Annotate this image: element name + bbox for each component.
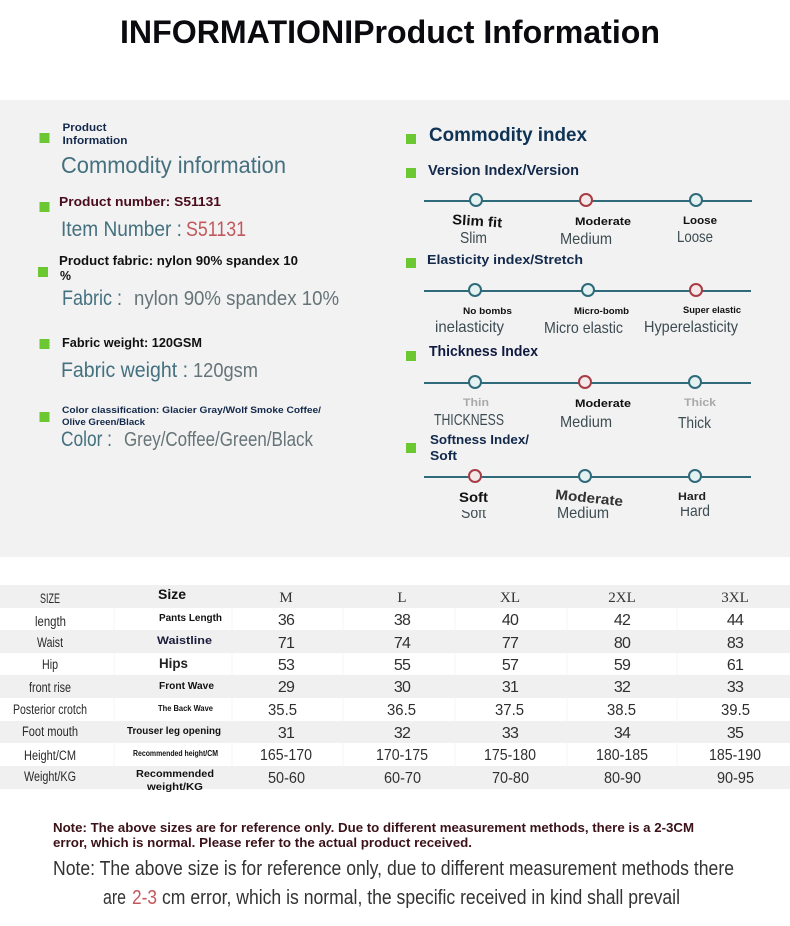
scale: elasticity: Hyperelasticity — [644, 319, 738, 336]
text: fabric weight label: Fabric weight: 120GSM — [62, 335, 202, 350]
row: weight: 70-80 — [492, 770, 529, 787]
row: front rise: front rise — [29, 680, 71, 695]
row: posterior crotch: Posterior crotch — [13, 702, 87, 717]
row: foot mouth: 35 — [727, 725, 744, 742]
row: weight: weight/KG — [146, 782, 203, 793]
icon: bullet product fabric — [38, 267, 48, 277]
scale: elasticity: inelasticity — [435, 319, 504, 336]
row: height: Recommended height/CM — [133, 749, 218, 758]
row: posterior crotch: 35.5 — [268, 702, 297, 719]
row: height: 170-175 — [376, 747, 428, 764]
scale: elasticity: Super elastic — [683, 305, 741, 316]
row: hip: Hip — [42, 657, 58, 672]
table header row: 2XL — [608, 590, 636, 606]
row: front rise: 32 — [614, 679, 631, 696]
row: hip: 59 — [614, 657, 631, 674]
scale: softness: Soft — [459, 489, 488, 505]
icon: bullet fabric weight — [40, 339, 50, 349]
scale: softness: Moderate — [555, 486, 624, 509]
row: foot mouth: 34 — [614, 725, 631, 742]
heading: softness index — [430, 433, 530, 463]
row: length: 44 — [727, 612, 744, 629]
row: weight: 80-90 — [604, 770, 641, 787]
row: hip: 53 — [278, 657, 295, 674]
scale: version: Loose — [677, 229, 713, 246]
scale: softness: Hard — [678, 491, 706, 503]
text: item number: S51131 — [186, 218, 246, 241]
scale: elasticity: No bombs — [463, 306, 512, 317]
scale: version — [424, 194, 752, 248]
row: waist: 74 — [394, 635, 411, 652]
row: waist — [37, 635, 744, 652]
text: color values: Color : — [61, 428, 112, 451]
text: product fabric — [59, 253, 298, 283]
icon: bullet color — [40, 412, 50, 422]
scale: thickness: Moderate — [575, 398, 631, 410]
scale: elasticity — [424, 284, 751, 337]
text: fabric composition — [62, 287, 339, 310]
row: weight: 90-95 — [717, 770, 754, 787]
row: front rise: 33 — [727, 679, 744, 696]
heading: product information: Product — [62, 122, 107, 134]
row: weight: 60-70 — [384, 770, 421, 787]
text: color values: Grey/Coffee/Green/Black — [124, 429, 314, 451]
panel: product specs background — [0, 100, 790, 557]
table header row: SIZE — [40, 591, 60, 606]
text: color values — [61, 428, 314, 451]
heading: elasticity index: Elasticity index/Stretch — [427, 252, 583, 267]
text: fabric weight value: 120gsm — [193, 360, 258, 382]
scale: thickness: Thick — [684, 397, 717, 409]
scale: softness — [424, 470, 751, 522]
heading: thickness index: Thickness Index — [429, 344, 538, 360]
row: front rise: 29 — [278, 679, 295, 696]
table header row — [40, 586, 749, 606]
heading: softness index: Softness Index/ — [430, 433, 530, 447]
row: height: 165-170 — [260, 747, 312, 764]
text: product fabric: Product fabric: nylon 90% spandex 10 — [59, 253, 298, 268]
panel: commodity information — [38, 122, 339, 451]
heading: version index: Version Index/Version — [428, 163, 579, 179]
text: product number: Product number: S51131 — [59, 194, 221, 209]
row: hip: 55 — [394, 657, 411, 674]
scale: version: Slim fit — [452, 211, 503, 231]
table header row: XL — [500, 590, 520, 606]
row: hip: 57 — [502, 657, 519, 674]
scale: softness: Medium — [557, 505, 609, 522]
row: height — [24, 747, 761, 764]
note: translated sizing note: Note: The above sizes are for reference only. Due to different measurement methods, there is a 2-3CM — [53, 821, 694, 835]
row: length — [35, 612, 744, 629]
note: sizing note: 2-3 — [132, 887, 157, 909]
row: weight — [24, 769, 754, 793]
row: height: 180-185 — [596, 747, 648, 764]
note: sizing note: cm error, which is normal, the specific received in kind shall prevail — [162, 887, 680, 909]
text: fabric weight value — [61, 359, 258, 382]
scale: thickness: Medium — [560, 414, 612, 431]
table header row: 3XL — [721, 590, 749, 606]
heading: softness index: Soft — [430, 449, 458, 463]
text: product fabric: % — [60, 268, 71, 283]
table: size chart — [0, 585, 790, 793]
row: front rise — [29, 679, 744, 696]
note: translated sizing note — [53, 821, 694, 850]
row: hip: Hips — [159, 655, 188, 671]
text: fabric composition: nylon 90% spandex 10% — [134, 288, 339, 310]
row: foot mouth: 33 — [502, 725, 519, 742]
row: length: length — [35, 614, 66, 629]
row: foot mouth: Foot mouth — [22, 724, 78, 739]
row: weight: Recommended — [136, 769, 214, 780]
row: waist: 77 — [502, 635, 519, 652]
row: foot mouth: Trouser leg opening — [127, 726, 221, 737]
text: color classification — [62, 405, 321, 428]
scale: thickness — [424, 376, 751, 432]
icon: bullet commodity index — [406, 134, 416, 144]
scale: elasticity: Micro elastic — [544, 320, 623, 337]
row: weight: 50-60 — [268, 770, 305, 787]
row: waist: Waistline — [157, 635, 212, 647]
scale: version: Moderate — [575, 216, 631, 228]
scale: softness: Soft — [461, 505, 486, 522]
row: hip — [42, 655, 744, 674]
row: length: 42 — [614, 612, 631, 629]
row: front rise: 31 — [502, 679, 519, 696]
row: length: Pants Length — [159, 613, 222, 624]
scale: softness: Hard — [680, 503, 710, 520]
row: length: 38 — [394, 612, 411, 629]
row: posterior crotch — [13, 702, 750, 719]
table header row: L — [397, 590, 407, 606]
title: INFORMATIONIProduct Information — [120, 14, 660, 50]
row: posterior crotch: 39.5 — [721, 702, 750, 719]
scale: elasticity: Micro-bomb — [574, 306, 629, 317]
scale: thickness: Thick — [678, 415, 712, 432]
row: length: 40 — [502, 612, 519, 629]
row: foot mouth: 31 — [278, 725, 295, 742]
scale: thickness: Thin — [463, 397, 489, 409]
row: waist: Waist — [37, 635, 63, 650]
row: foot mouth: 32 — [394, 725, 411, 742]
heading: commodity index: Commodity index — [429, 125, 587, 146]
row: hip: 61 — [727, 657, 744, 674]
panel: commodity index — [406, 125, 752, 522]
scale: version: Medium — [560, 231, 612, 248]
text: commodity information: Commodity information — [61, 152, 286, 178]
scale: version: Loose — [683, 215, 717, 227]
row: length: 36 — [278, 612, 295, 629]
row: front rise: Front Wave — [159, 681, 214, 692]
icon: bullet elasticity — [406, 258, 416, 268]
note: translated sizing note: error, which is normal. Please refer to the actual product received. — [53, 836, 472, 850]
row: waist: 71 — [278, 635, 295, 652]
scale: version: Slim — [460, 230, 487, 247]
text: item number: Item Number : — [61, 218, 182, 241]
heading: product information: Information — [62, 135, 128, 147]
table header row: M — [279, 590, 293, 606]
heading: product information — [62, 122, 128, 147]
row: waist: 80 — [614, 635, 631, 652]
row: height: 185-190 — [709, 747, 761, 764]
table header row: Size — [158, 586, 186, 602]
row: posterior crotch: 38.5 — [607, 702, 636, 719]
row: foot mouth — [22, 724, 744, 742]
row: waist: 83 — [727, 635, 744, 652]
icon: bullet product number — [40, 202, 50, 212]
row: height: 175-180 — [484, 747, 536, 764]
text: fabric composition: Fabric : — [62, 287, 122, 310]
row: height: Height/CM — [24, 748, 76, 763]
icon: bullet thickness — [406, 351, 416, 361]
text: color classification: Color classification: Glacier Gray/Wolf Smoke Coffee/ — [62, 405, 321, 416]
icon: bullet softness — [406, 443, 416, 453]
row: posterior crotch: 36.5 — [387, 702, 416, 719]
row: front rise: 30 — [394, 679, 411, 696]
note: sizing note: are — [103, 887, 126, 909]
icon: bullet product information — [40, 133, 50, 143]
row: posterior crotch: The Back Wave — [158, 703, 213, 713]
note: sizing note — [53, 858, 734, 909]
icon: bullet version — [406, 168, 416, 178]
scale: thickness: THICKNESS — [434, 412, 504, 429]
row: posterior crotch: 37.5 — [495, 702, 524, 719]
text: color classification: Olive Green/Black — [62, 417, 146, 428]
text: fabric weight value: Fabric weight : — [61, 359, 188, 382]
row: weight: Weight/KG — [24, 769, 76, 784]
